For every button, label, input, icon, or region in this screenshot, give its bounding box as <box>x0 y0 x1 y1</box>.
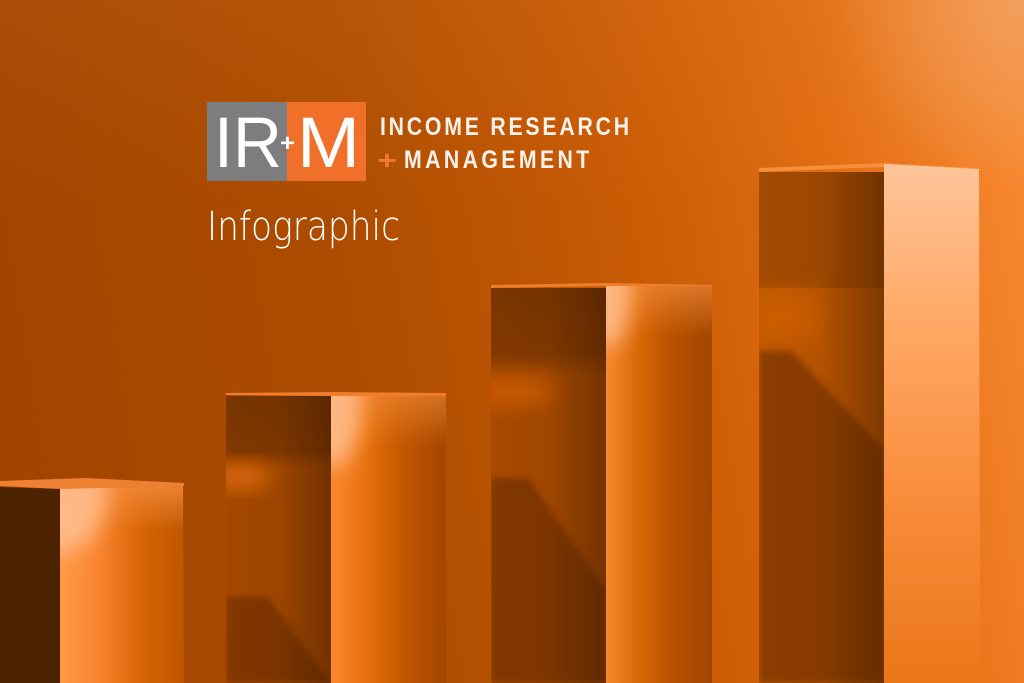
logo orange square <box>287 102 366 181</box>
bar 1 light side <box>60 486 184 683</box>
bar 1 dark side <box>0 487 60 683</box>
bar 2 dark side <box>226 396 331 683</box>
bar 1 <box>0 478 184 683</box>
bar 2 <box>226 392 446 683</box>
bar 4 dark side <box>759 168 884 683</box>
logo mark letter M: M <box>297 104 360 183</box>
orange plus: + <box>377 145 397 175</box>
bar 3 light side <box>606 286 712 683</box>
bar 2 top face <box>226 392 446 396</box>
bar 1 top face <box>0 478 184 489</box>
bar 4 <box>759 163 980 683</box>
company name line 2: MANAGEMENT <box>404 145 589 173</box>
bar 3 <box>473 243 712 683</box>
bar 3 dark side <box>491 288 606 683</box>
logo <box>207 102 629 183</box>
logo grey square <box>207 102 287 181</box>
company name line 1: INCOME RESEARCH <box>380 112 629 140</box>
heading: Infographic: Infographic <box>207 204 400 250</box>
bar 4 light side <box>884 164 980 683</box>
logo mark letters IR: IR <box>214 104 282 183</box>
bar 4 top face <box>759 163 979 172</box>
bar 3 top face <box>491 283 712 288</box>
bar 2 light side <box>331 396 446 683</box>
logo mark plus: + <box>280 130 295 157</box>
